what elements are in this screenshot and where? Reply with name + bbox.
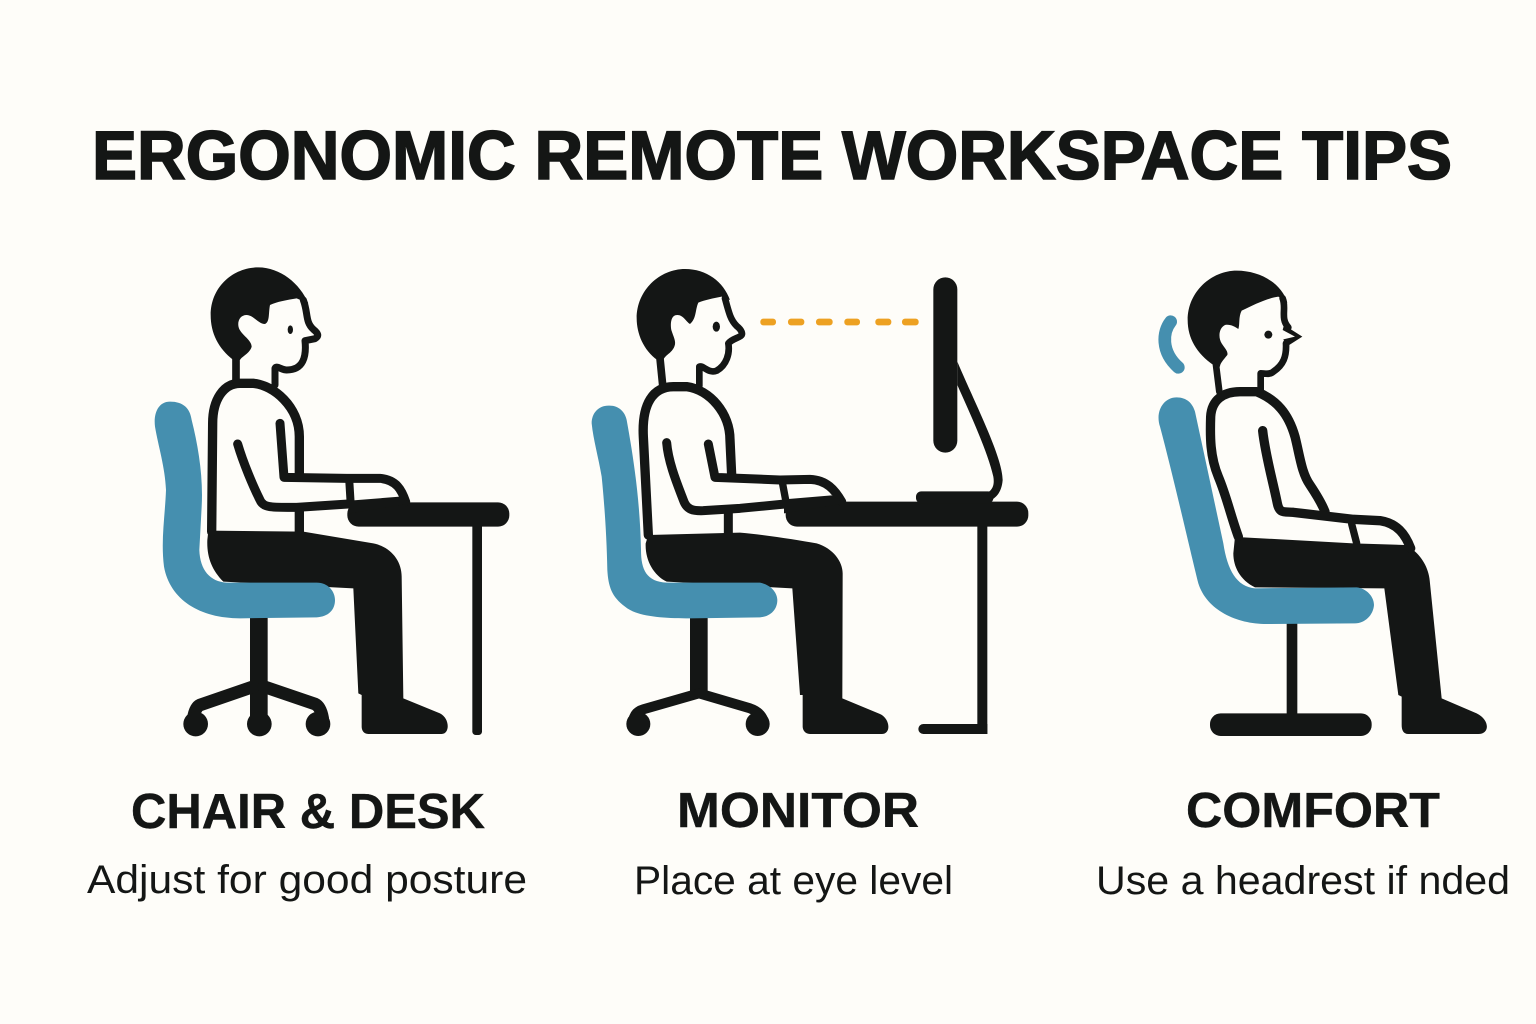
- icon: chair base: [626, 617, 770, 736]
- heading: comfort: COMFORT: [1186, 784, 1440, 838]
- person legs: [646, 533, 888, 734]
- icon: chair seat and back: [155, 402, 335, 618]
- person head: [211, 267, 318, 385]
- person head: [637, 269, 742, 386]
- icon: chair seat and back: [1159, 397, 1374, 624]
- person torso and arm: [212, 383, 412, 532]
- caption: monitor: Place at eye level: [634, 859, 953, 903]
- panel: comfort figure: [1159, 271, 1487, 736]
- person torso and arm: [1210, 392, 1411, 548]
- panel: chair and desk figure: [155, 267, 509, 736]
- caption: chair and desk: Adjust for good posture: [87, 858, 527, 902]
- icon: chair base: [183, 617, 330, 736]
- icon: chair base: [1210, 622, 1372, 736]
- heading: monitor: MONITOR: [677, 784, 919, 838]
- heading: chair and desk: CHAIR & DESK: [131, 785, 485, 839]
- person head: [1188, 271, 1302, 392]
- eye line: [760, 319, 919, 325]
- icon: chair seat and back: [592, 406, 777, 618]
- icon: headrest: [1165, 322, 1178, 367]
- person torso and arm: [643, 387, 845, 535]
- icon: monitor: [916, 277, 1003, 503]
- title: ERGONOMIC REMOTE WORKSPACE TIPS: [92, 117, 1452, 194]
- icon: desk: [347, 502, 509, 735]
- person legs: [207, 531, 448, 734]
- panel: monitor figure: [592, 269, 1028, 736]
- person legs: [1233, 537, 1487, 734]
- icon: desk: [786, 502, 1028, 734]
- caption: comfort: Use a headrest if nded: [1096, 859, 1510, 903]
